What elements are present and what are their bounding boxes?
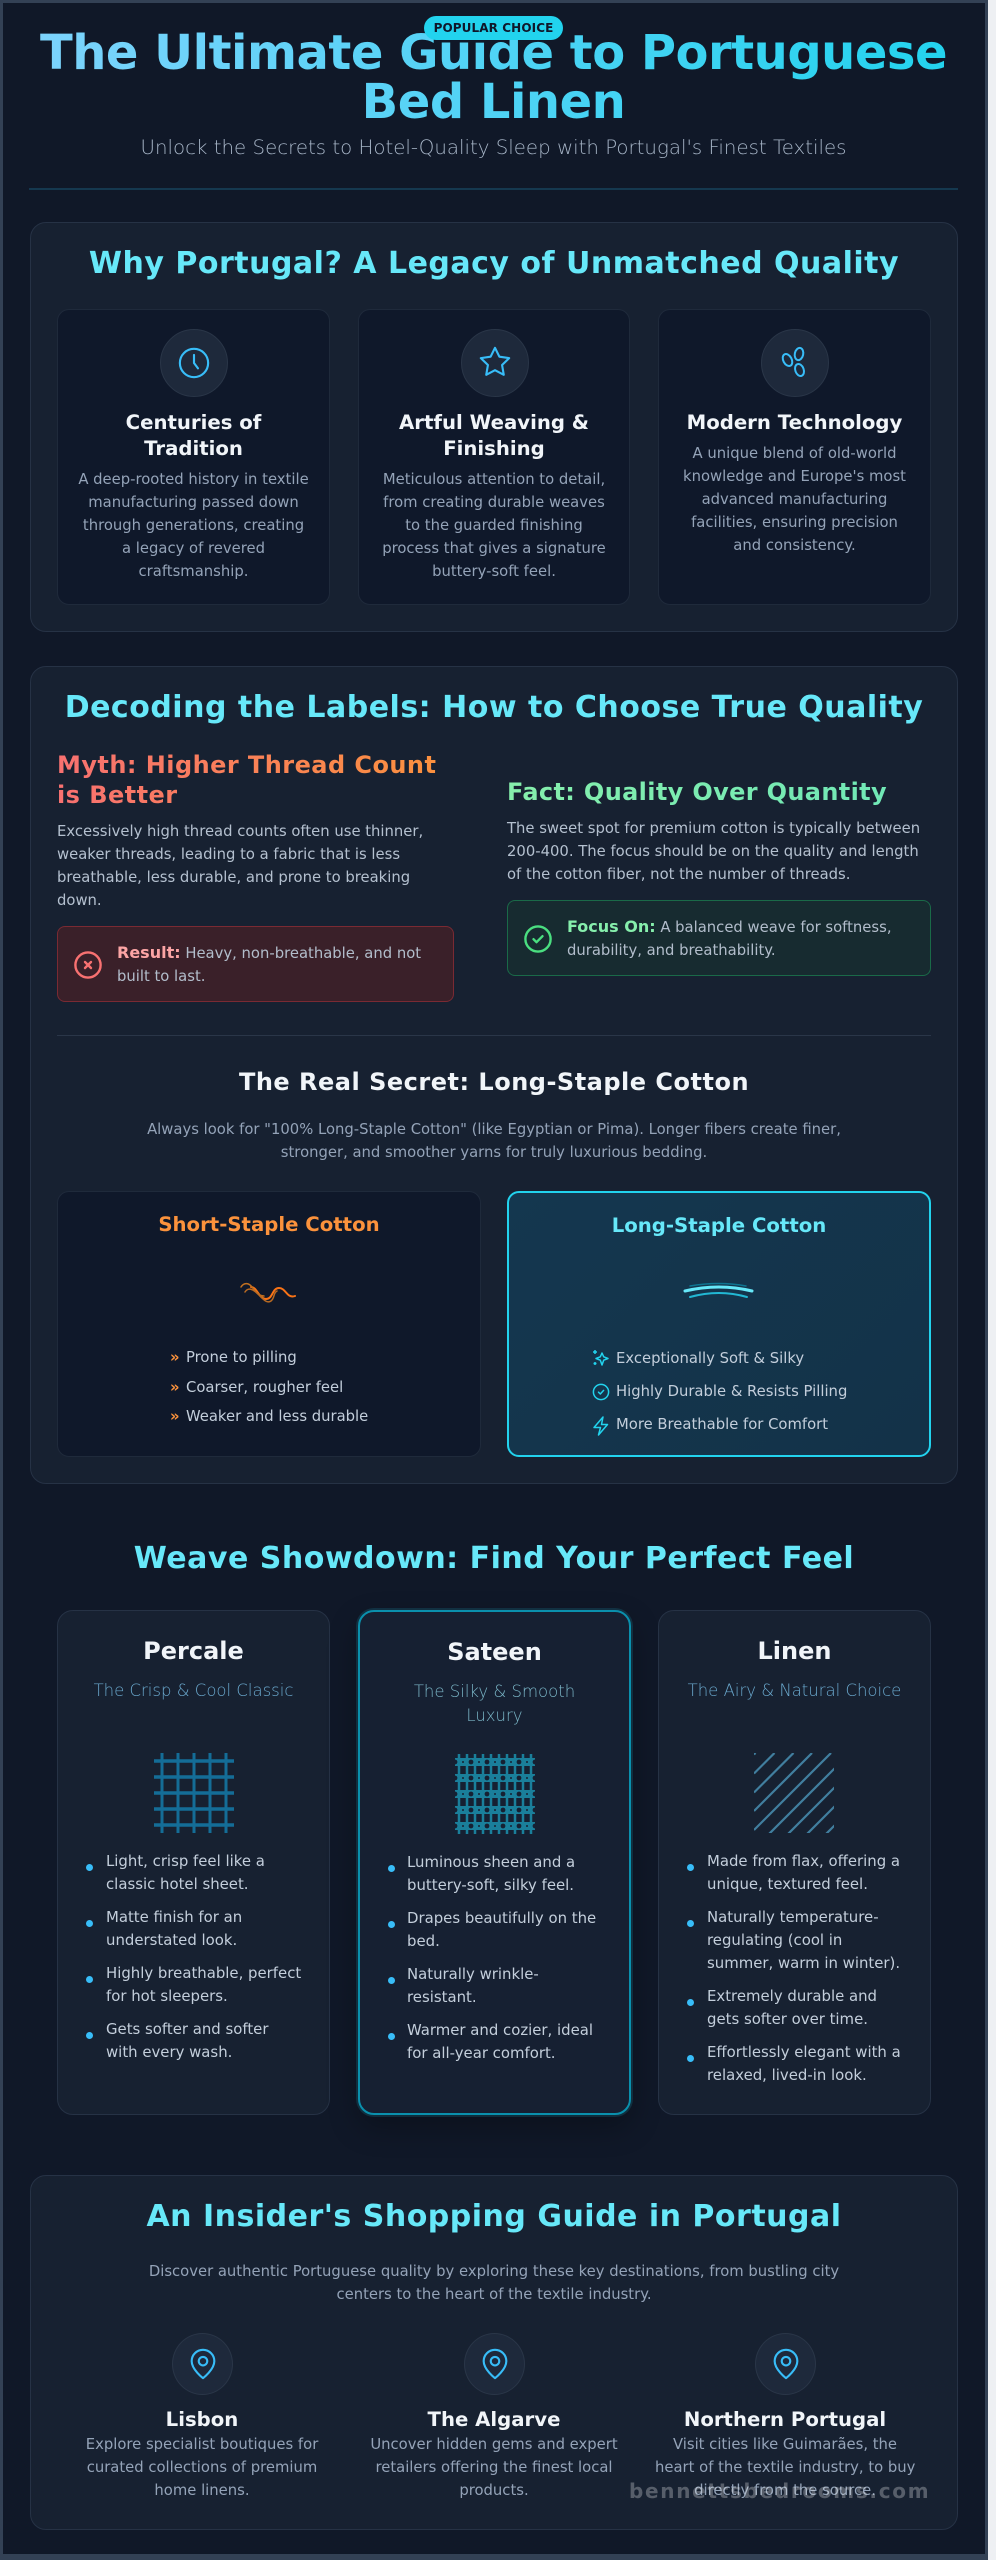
title: Bed Linen bbox=[362, 74, 625, 130]
icon: x circle bbox=[74, 951, 102, 979]
list: short-staple drawbacks: Prone to pilling bbox=[186, 1349, 297, 1366]
heading: decoding the labels: Decoding the Labels: How to Choose True Quality bbox=[65, 690, 923, 725]
icon: shield check bbox=[592, 1384, 610, 1400]
card heading: Modern Technology bbox=[687, 411, 902, 434]
list: linen features: regulating (cool in bbox=[707, 1931, 842, 1949]
list: long-staple benefits: Highly Durable & Resists Pilling bbox=[616, 1383, 847, 1400]
focus text bbox=[567, 917, 892, 959]
card: sateen bbox=[358, 1610, 631, 2115]
result text bbox=[117, 943, 421, 985]
icon: short wavy fibers bbox=[240, 1282, 296, 1303]
card: percale bbox=[57, 1610, 330, 2115]
list: percale features: with every wash. bbox=[106, 2043, 232, 2061]
card text: process that gives a signature bbox=[382, 540, 606, 557]
myth heading: is Better bbox=[57, 781, 178, 809]
card: long-staple cotton bbox=[507, 1191, 931, 1457]
myth text: weaker threads, leading to a fabric that is less bbox=[57, 846, 400, 863]
list: short-staple drawbacks: » bbox=[170, 1408, 180, 1425]
title: The Ultimate Guide to Portuguese bbox=[40, 25, 947, 81]
card text bbox=[78, 471, 309, 580]
callout: focus on bbox=[507, 900, 931, 976]
card: modern technology bbox=[658, 309, 931, 605]
card text: A deep-rooted history in textile bbox=[78, 471, 309, 488]
heading: why portugal: Why Portugal? A Legacy of Unmatched Quality bbox=[89, 246, 899, 281]
list: linen features: Naturally temperature- bbox=[707, 1908, 879, 1926]
location: lisbon bbox=[86, 2333, 318, 2499]
card heading: Finishing bbox=[443, 437, 545, 460]
callout: result bbox=[57, 926, 454, 1002]
card text: Meticulous attention to detail, bbox=[383, 471, 605, 488]
fact text: of the cotton fiber, not the number of threads. bbox=[507, 866, 850, 883]
intro text: long-staple bbox=[147, 1120, 841, 1160]
myth text: down. bbox=[57, 892, 102, 909]
title bbox=[29, 29, 958, 128]
weave subtitle: The Crisp & Cool Classic bbox=[94, 1681, 293, 1700]
list: percale features: classic hotel sheet. bbox=[106, 1875, 249, 1893]
list: sateen features: resistant. bbox=[407, 1988, 477, 2006]
focus text: durability, and breathability. bbox=[567, 942, 776, 959]
weave subtitle: The Airy & Natural Choice bbox=[688, 1681, 901, 1700]
icon: sateen weave bbox=[455, 1754, 535, 1834]
card text: knowledge and Europe's most bbox=[683, 468, 906, 485]
card: linen bbox=[658, 1610, 931, 2115]
card text: to the guarded finishing bbox=[405, 517, 583, 534]
location name: The Algarve bbox=[428, 2408, 560, 2431]
icon: map pin bbox=[172, 2333, 233, 2395]
icon: star bbox=[461, 329, 529, 397]
list: linen features: Extremely durable and bbox=[707, 1987, 877, 2005]
card: artful weaving bbox=[358, 309, 630, 605]
location text bbox=[655, 2436, 915, 2499]
card text: and consistency. bbox=[733, 537, 856, 554]
list: percale features: Matte finish for an bbox=[106, 1908, 242, 1926]
card text: A unique blend of old-world bbox=[693, 445, 896, 462]
list: sateen features: buttery-soft, silky feel. bbox=[407, 1876, 574, 1894]
weave title: Linen bbox=[758, 1637, 831, 1665]
card text bbox=[382, 471, 606, 580]
location text: Explore specialist boutiques for bbox=[86, 2436, 318, 2453]
weave title: Sateen bbox=[447, 1638, 542, 1666]
badge: popular choice: POPULAR CHOICE bbox=[434, 21, 553, 35]
list: percale features: Light, crisp feel like a bbox=[106, 1852, 265, 1870]
intro text: shopping guide: Discover authentic Portuguese quality by exploring these key destinations, from bustling city bbox=[149, 2263, 839, 2280]
card text: facilities, ensuring precision bbox=[691, 514, 898, 531]
result text: built to last. bbox=[117, 968, 205, 985]
list: sateen features: Luminous sheen and a bbox=[407, 1853, 575, 1871]
location text: retailers offering the finest local bbox=[375, 2459, 613, 2476]
list: long-staple benefits bbox=[592, 1350, 847, 1436]
card heading: Long-Staple Cotton bbox=[612, 1214, 826, 1237]
intro text: shopping guide bbox=[149, 2263, 839, 2303]
location: the algarve bbox=[370, 2333, 618, 2499]
location text: Uncover hidden gems and expert bbox=[370, 2436, 618, 2453]
location text: directly from the source. bbox=[694, 2482, 876, 2499]
card text: buttery-soft feel. bbox=[432, 563, 556, 580]
icon: bolt bbox=[593, 1416, 608, 1436]
icon: linen weave bbox=[754, 1753, 834, 1833]
intro text: long-staple: Always look for "100% Long-Staple Cotton" (like Egyptian or Pima). Longer fibers create finer, bbox=[147, 1120, 841, 1138]
card text: a legacy of revered bbox=[122, 540, 265, 557]
card text bbox=[683, 445, 906, 554]
fact heading: Fact: Quality Over Quantity bbox=[507, 778, 887, 806]
result text: Result: Heavy, non-breathable, and not bbox=[117, 943, 421, 962]
list: short-staple drawbacks: » bbox=[170, 1379, 180, 1396]
icon: long smooth fibers bbox=[684, 1282, 754, 1298]
location text bbox=[370, 2436, 618, 2499]
list: short-staple drawbacks: Coarser, rougher feel bbox=[186, 1379, 343, 1396]
card text: advanced manufacturing bbox=[702, 491, 887, 508]
card heading: Artful Weaving & bbox=[399, 411, 589, 434]
panel: decoding the labels bbox=[30, 666, 958, 1484]
card: centuries of tradition bbox=[57, 309, 330, 605]
focus text: Focus On: A balanced weave for softness, bbox=[567, 917, 892, 936]
location text: curated collections of premium bbox=[87, 2459, 317, 2476]
list: sateen features: bed. bbox=[407, 1932, 440, 1950]
subheading: the real secret: The Real Secret: Long-Staple Cotton bbox=[239, 1068, 749, 1096]
heading: weave showdown: Weave Showdown: Find Your Perfect Feel bbox=[134, 1541, 854, 1576]
fact text: The sweet spot for premium cotton is typically between bbox=[507, 820, 920, 837]
location text: heart of the textile industry, to buy bbox=[655, 2459, 915, 2476]
icon: map pin bbox=[464, 2333, 525, 2395]
card heading: Centuries of bbox=[126, 411, 261, 434]
myth text bbox=[57, 823, 423, 909]
list: linen features: Effortlessly elegant with a bbox=[707, 2043, 901, 2061]
weave subtitle: Luxury bbox=[466, 1706, 523, 1725]
list: long-staple benefits: More Breathable for Comfort bbox=[616, 1416, 828, 1433]
fact text: 200-400. The focus should be on the quality and length bbox=[507, 843, 919, 860]
weave subtitle: The Silky & Smooth bbox=[414, 1682, 575, 1701]
location text: products. bbox=[459, 2482, 529, 2499]
list: linen features bbox=[687, 1852, 901, 2084]
card text: manufacturing passed down bbox=[88, 494, 299, 511]
list: linen features: summer, warm in winter). bbox=[707, 1954, 900, 1972]
location text bbox=[86, 2436, 318, 2499]
icon: percale weave bbox=[154, 1753, 234, 1833]
list: percale features: for hot sleepers. bbox=[106, 1987, 228, 2005]
myth heading: Myth: Higher Thread Count bbox=[57, 751, 436, 779]
weave title: Percale bbox=[143, 1637, 244, 1665]
card heading bbox=[126, 411, 262, 460]
card heading: Tradition bbox=[144, 437, 243, 460]
location text: home linens. bbox=[154, 2482, 250, 2499]
intro text: long-staple: stronger, and smoother yarns for truly luxurious bedding. bbox=[281, 1144, 707, 1160]
location text: Visit cities like Guimarães, the bbox=[673, 2436, 897, 2453]
card text: through generations, creating bbox=[83, 517, 304, 534]
list: sateen features: Naturally wrinkle- bbox=[407, 1965, 539, 1983]
list: sateen features: Warmer and cozier, ideal bbox=[407, 2021, 593, 2039]
list: linen features: relaxed, lived-in look. bbox=[707, 2066, 867, 2084]
myth text: breathable, less durable, and prone to breaking bbox=[57, 869, 410, 886]
card text: from creating durable weaves bbox=[383, 494, 605, 511]
list: sateen features: Drapes beautifully on the bbox=[407, 1909, 596, 1927]
list: percale features: understated look. bbox=[106, 1931, 237, 1949]
watermark: bennettsbedrooms.com bbox=[629, 2479, 930, 2503]
intro text: shopping guide: centers to the heart of the textile industry. bbox=[336, 2286, 652, 2303]
panel: shopping guide bbox=[30, 2175, 958, 2530]
location name: Lisbon bbox=[166, 2408, 238, 2431]
list: linen features: gets softer over time. bbox=[707, 2010, 868, 2028]
card heading bbox=[399, 411, 589, 460]
panel: why portugal bbox=[30, 222, 958, 632]
subtitle: Unlock the Secrets to Hotel-Quality Sleep with Portugal's Finest Textiles bbox=[141, 136, 846, 159]
list: linen features: unique, textured feel. bbox=[707, 1875, 868, 1893]
icon: map pin bbox=[755, 2333, 816, 2395]
list: long-staple benefits: Exceptionally Soft & Silky bbox=[616, 1350, 804, 1367]
badge: popular choice bbox=[424, 16, 563, 40]
myth text: Excessively high thread counts often use thinner, bbox=[57, 823, 423, 840]
list: percale features bbox=[86, 1852, 301, 2061]
myth heading bbox=[57, 750, 454, 810]
icon: links bbox=[761, 329, 829, 397]
list: short-staple drawbacks: » bbox=[170, 1349, 180, 1366]
icon: clock bbox=[160, 329, 228, 397]
list: short-staple drawbacks: Weaker and less durable bbox=[186, 1408, 368, 1425]
icon: sparkles bbox=[593, 1350, 609, 1366]
weave subtitle bbox=[414, 1682, 575, 1725]
heading: shopping guide: An Insider's Shopping Guide in Portugal bbox=[146, 2199, 842, 2234]
card text: craftsmanship. bbox=[139, 563, 248, 580]
list: short-staple drawbacks bbox=[170, 1349, 368, 1425]
icon: check circle bbox=[524, 925, 552, 953]
list: sateen features: for all-year comfort. bbox=[407, 2044, 556, 2062]
location name: Northern Portugal bbox=[684, 2408, 886, 2431]
card: short-staple cotton bbox=[57, 1191, 481, 1457]
list: linen features: Made from flax, offering a bbox=[707, 1852, 900, 1870]
list: percale features: Highly breathable, perfect bbox=[106, 1964, 301, 1982]
card heading: Short-Staple Cotton bbox=[158, 1213, 380, 1236]
list: sateen features bbox=[388, 1853, 596, 2062]
fact text bbox=[506, 820, 920, 883]
location: northern portugal bbox=[655, 2333, 915, 2499]
list: percale features: Gets softer and softer bbox=[106, 2020, 268, 2038]
